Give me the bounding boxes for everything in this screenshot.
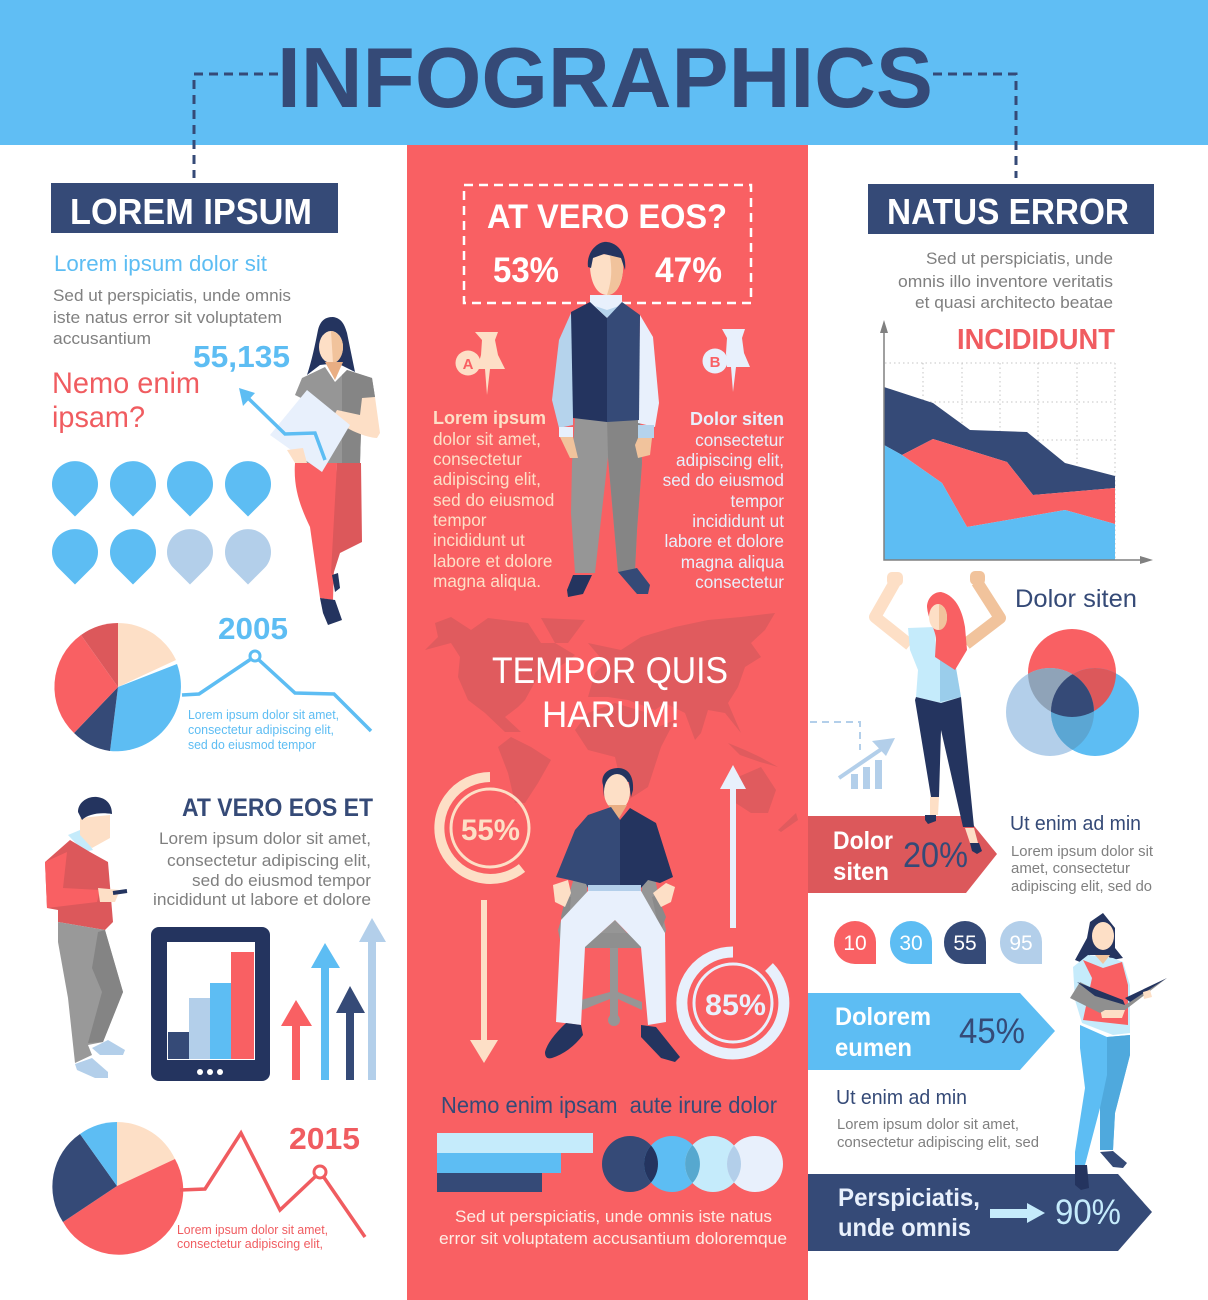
tablet bar chart	[151, 927, 270, 1081]
text block A: tempor	[433, 510, 487, 530]
icon: small growth chart	[810, 722, 895, 789]
arrow label: perspiciatis 90%: Perspiciatis,	[838, 1184, 980, 1212]
arrow label: dolor siten 20%: 20%	[903, 836, 968, 875]
caption 2015	[177, 1223, 328, 1251]
intro text block: Sed ut perspiciatis, unde omnis	[53, 286, 291, 305]
text block A: dolor sit amet,	[433, 429, 541, 449]
figure: woman with book	[1070, 913, 1167, 1190]
text block A	[433, 408, 554, 591]
question box: 47%	[655, 251, 722, 290]
panel: center red column	[407, 145, 808, 1300]
icon: pin B: B	[710, 354, 721, 371]
number bubbles: 95	[1009, 932, 1033, 955]
figure: woman with tablet	[270, 317, 380, 625]
intro text block: iste natus error sit voluptatem	[53, 308, 282, 327]
number bubbles	[834, 921, 1042, 964]
arrow up	[720, 765, 746, 928]
pie chart 2015	[52, 1122, 183, 1255]
text block B: sed do eiusmod	[663, 470, 784, 490]
heading: tempor quis harum: HARUM!	[542, 694, 680, 735]
text block: ut enim 2: Ut enim ad min	[836, 1087, 967, 1109]
text block: ut enim 2	[836, 1087, 1039, 1151]
text block: ut enim: adipiscing elit, sed do	[1011, 879, 1152, 895]
arrow label: dolorem eumen 45%: 45%	[959, 1012, 1025, 1051]
header banner	[0, 0, 1208, 145]
text block: ut enim 2: consectetur adipiscing elit, sed	[837, 1135, 1039, 1151]
year label 2005: 2005	[218, 611, 288, 646]
year label 2015: 2015	[289, 1121, 360, 1156]
arrow label: dolor siten 20%: Dolor	[833, 827, 893, 855]
line chart 2015	[180, 1133, 365, 1237]
text block A: Lorem ipsum	[433, 408, 546, 428]
question heading: Nemo enim	[52, 367, 200, 400]
chart heading: INCIDIDUNT	[957, 324, 1115, 356]
ring chart 85%	[682, 952, 784, 1054]
text block: ut enim: amet, consectetur	[1011, 861, 1130, 877]
venn diagram	[1006, 629, 1139, 756]
stacked bars	[437, 1133, 593, 1192]
line chart 2005	[182, 651, 371, 731]
number bubbles: 55	[953, 932, 977, 955]
title: INFOGRAPHICS	[277, 31, 933, 126]
body text: incididunt ut labore et dolore	[153, 890, 371, 909]
figure: woman arms raised	[875, 571, 1000, 854]
text block B: consectetur	[695, 430, 784, 450]
rising arrows	[281, 918, 386, 1080]
ring chart 55%: 55%	[461, 814, 520, 847]
text block A: incididunt ut	[433, 530, 525, 550]
text block: ut enim 2: Lorem ipsum dolor sit amet,	[837, 1117, 1019, 1133]
text block: ut enim	[1010, 813, 1153, 895]
heading: tempor quis harum: TEMPOR QUIS	[492, 650, 728, 691]
text block B: magna aliqua	[681, 552, 784, 572]
caption 2015: Lorem ipsum dolor sit amet,	[177, 1223, 328, 1237]
text block A: sed do eiusmod	[433, 490, 554, 510]
panel: right column	[808, 184, 1167, 1251]
caption 2015: consectetur adipiscing elit,	[177, 1237, 323, 1251]
icon: pin B	[702, 329, 750, 392]
stat: 55,135: 55,135	[193, 339, 290, 374]
pictogram: 8 location pins	[52, 461, 271, 584]
panel: left column	[45, 183, 386, 1255]
question heading	[52, 367, 200, 434]
figure: seated man	[545, 768, 680, 1062]
arrow label: perspiciatis 90%: 90%	[1055, 1193, 1121, 1232]
intro text: Sed ut perspiciatis, unde	[926, 249, 1113, 268]
number bubbles: 30	[899, 932, 923, 955]
world map	[425, 613, 798, 832]
footer text	[439, 1207, 787, 1248]
text block B: incididunt ut	[692, 511, 784, 531]
overlapping circles	[602, 1136, 783, 1192]
arrow label: perspiciatis 90%: unde omnis	[838, 1214, 971, 1242]
text block B: consectetur	[695, 572, 784, 592]
text block A: adipiscing elit,	[433, 469, 541, 489]
icon: pin A: A	[463, 356, 474, 373]
ring chart 55%	[439, 777, 529, 879]
panel: center content	[425, 185, 798, 1248]
text block B: adipiscing elit,	[676, 450, 784, 470]
label: dolor siten: Dolor siten	[1015, 585, 1137, 613]
subheading: Lorem ipsum dolor sit	[54, 251, 267, 276]
question box	[464, 185, 751, 303]
intro text block	[53, 286, 291, 348]
arrow label: dolorem eumen 45%: Dolorem	[835, 1003, 931, 1031]
footer text: error sit voluptatem accusantium doloremque	[439, 1229, 787, 1248]
question heading: ipsam?	[52, 401, 145, 434]
pie chart 2005	[54, 623, 181, 751]
intro text	[898, 249, 1113, 312]
icon: pin A	[456, 332, 505, 395]
arrow label: perspiciatis 90%	[808, 1174, 1152, 1251]
text block A: magna aliqua.	[433, 571, 541, 591]
ring chart 85%: 85%	[705, 989, 766, 1022]
arrow label: dolor siten 20%: siten	[833, 858, 889, 886]
body text: Lorem ipsum dolor sit amet,	[159, 829, 371, 848]
heading: tempor quis harum	[492, 650, 728, 735]
text block B: Dolor siten	[690, 409, 784, 429]
body text: consectetur adipiscing elit,	[167, 851, 371, 870]
question box: 53%	[493, 251, 559, 290]
area chart	[880, 320, 1153, 564]
intro text: et quasi architecto beatae	[915, 293, 1113, 312]
footer text: Sed ut perspiciatis, unde omnis iste natus	[455, 1207, 772, 1226]
text block: ut enim: Ut enim ad min	[1010, 813, 1141, 835]
arrow label: dolorem eumen 45%	[808, 993, 1055, 1070]
heading: natus error: NATUS ERROR	[887, 191, 1129, 232]
body text	[153, 829, 371, 909]
intro text block: accusantium	[53, 329, 151, 348]
text block: ut enim: Lorem ipsum dolor sit	[1011, 844, 1153, 860]
number bubbles: 10	[843, 932, 867, 955]
figure: standing man	[552, 242, 659, 597]
caption 2005	[188, 708, 339, 752]
arrow down	[470, 900, 498, 1063]
body text: sed do eiusmod tempor	[192, 871, 371, 890]
text block B	[663, 409, 784, 592]
arrow label: dolor siten 20%	[808, 816, 997, 893]
text block A: labore et dolore	[433, 551, 552, 571]
chart arrow: growth	[239, 388, 325, 460]
subheading: nemo enim: Nemo enim ipsam aute irure dolor	[441, 1092, 777, 1118]
text block A: consectetur	[433, 449, 522, 469]
figure: man with phone	[45, 797, 127, 1078]
intro text: omnis illo inventore veritatis	[898, 272, 1113, 291]
question box: AT VERO EOS?	[487, 198, 727, 236]
text block B: tempor	[730, 491, 784, 511]
heading: at vero eos et: AT VERO EOS ET	[182, 794, 373, 822]
arrow label: dolorem eumen 45%: eumen	[835, 1034, 912, 1062]
heading: lorem ipsum: LOREM IPSUM	[70, 191, 312, 232]
caption 2005: Lorem ipsum dolor sit amet,	[188, 708, 339, 722]
text block B: labore et dolore	[665, 531, 784, 551]
caption 2005: sed do eiusmod tempor	[188, 738, 316, 752]
caption 2005: consectetur adipiscing elit,	[188, 723, 334, 737]
